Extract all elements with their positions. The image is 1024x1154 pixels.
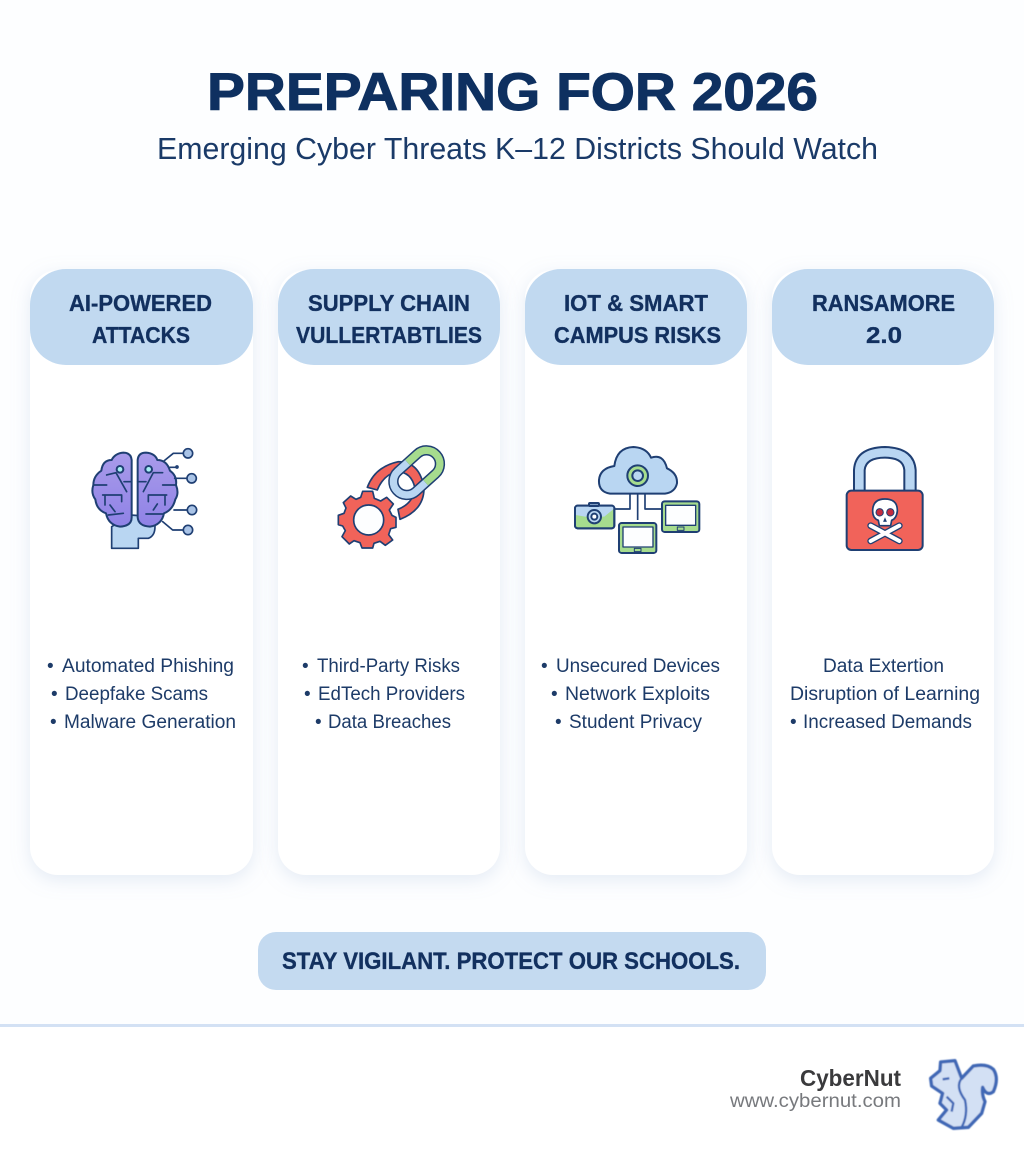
- heading: supply chain: [278, 269, 500, 365]
- icon: brain with circuit nodes: [92, 449, 197, 548]
- bullet list: •: [47, 656, 54, 677]
- bullet list: Deepfake Scams: [65, 684, 208, 705]
- bullet list: Malware Generation: [64, 712, 236, 733]
- bullet list: Automated Phishing: [62, 656, 234, 677]
- bullet list: Student Privacy: [569, 712, 702, 733]
- bullet list: •: [304, 684, 311, 705]
- text list: Data Extertion: [823, 656, 944, 677]
- bullet list: •: [302, 656, 309, 677]
- heading: IoT: [525, 269, 747, 365]
- panel: ransomware 2.0: [772, 269, 994, 875]
- text list: Disruption of Learning: [790, 684, 980, 705]
- bullet list: Network Exploits: [565, 684, 710, 705]
- heading: supply chain: VULLERTABTLIES: [296, 322, 482, 348]
- panel: AI-powered attacks: [30, 269, 253, 875]
- bullet list: •: [541, 656, 548, 677]
- subtitle: Emerging Cyber Threats K–12 Districts Should Watch: [157, 131, 878, 166]
- icon: gear and chain links: [338, 445, 446, 548]
- bullet list: [541, 656, 720, 733]
- panel: supply chain vulnerabilities: [278, 269, 500, 875]
- heading: ransomware: 2.0: [866, 322, 902, 348]
- bullet list: •: [551, 684, 558, 705]
- bullet list: •: [51, 684, 58, 705]
- heading: IoT: CAMPUS RISKS: [554, 322, 721, 348]
- heading: IoT: IOT & SMART: [564, 290, 708, 316]
- heading: ransomware: [772, 269, 994, 365]
- bullet list: •: [50, 712, 57, 733]
- bullet list: Data Breaches: [328, 712, 451, 733]
- icon: padlock with skull: [847, 447, 923, 550]
- bullet list: EdTech Providers: [318, 684, 465, 705]
- bullet list: Unsecured Devices: [556, 656, 720, 677]
- bullet list: Third-Party Risks: [317, 656, 460, 677]
- heading: AI-powered attacks: AI-POWERED: [69, 290, 212, 316]
- heading: supply chain: SUPPLY CHAIN: [308, 290, 470, 316]
- panel: IoT and smart campus risks: [525, 269, 747, 875]
- callout banner: STAY VIGILANT. PROTECT OUR SCHOOLS.: [282, 948, 740, 975]
- icon: squirrel logo: [931, 1061, 996, 1128]
- bullet list: [302, 656, 465, 733]
- title: PREPARING FOR 2026: [207, 63, 818, 122]
- footer brand: www.cybernut.com: [729, 1091, 901, 1112]
- bullet list: [47, 656, 236, 733]
- bullet list: •: [555, 712, 562, 733]
- icon: cloud with connected devices: [575, 447, 699, 553]
- footer brand: [729, 1065, 901, 1112]
- bullet list: •: [315, 712, 322, 733]
- callout banner: [258, 932, 766, 990]
- text list: •: [790, 712, 797, 733]
- heading: ransomware: RANSAMORE: [812, 290, 955, 316]
- heading: AI-powered attacks: ATTACKS: [92, 322, 190, 348]
- text list: Increased Demands: [803, 712, 972, 733]
- footer brand: CyberNut: [800, 1065, 901, 1091]
- text list: [790, 656, 980, 733]
- heading: AI-powered attacks: [30, 269, 253, 365]
